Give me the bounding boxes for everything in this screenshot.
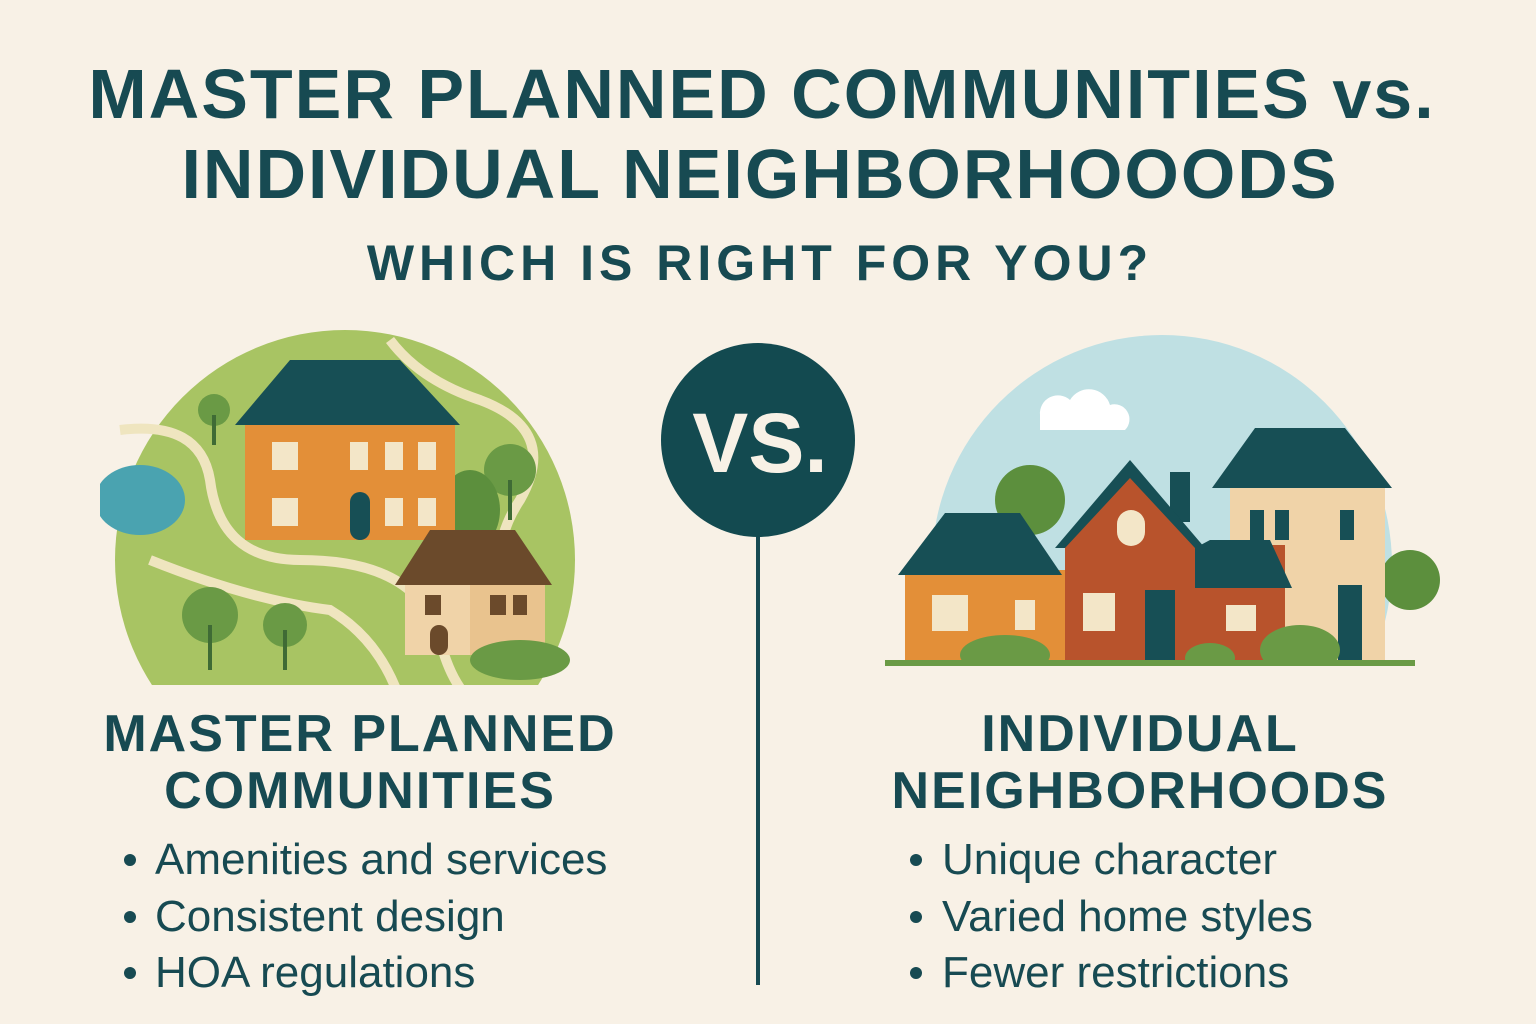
subtitle: WHICH IS RIGHT FOR YOU?: [367, 235, 1153, 291]
title: [88, 55, 1436, 213]
illustration: individual neighborhood: [885, 335, 1440, 666]
right bullets: Fewer restrictions: [942, 948, 1289, 997]
title: INDIVIDUAL NEIGHBORHOOODS: [181, 135, 1339, 213]
illustration: master planned community: [100, 330, 575, 685]
left bullets: Consistent design: [155, 892, 505, 941]
right bullets: [910, 835, 1313, 997]
left heading: COMMUNITIES: [164, 762, 556, 820]
left heading: [103, 705, 617, 820]
right heading: NEIGHBORHOODS: [892, 762, 1388, 820]
right bullets: Varied home styles: [942, 892, 1313, 941]
left bullets: [124, 835, 607, 997]
title: MASTER PLANNED COMMUNITIES vs.: [88, 55, 1436, 133]
left heading: MASTER PLANNED: [103, 705, 617, 763]
left bullets: Amenities and services: [155, 835, 607, 884]
left bullets: HOA regulations: [155, 948, 475, 997]
right bullets: Unique character: [942, 835, 1277, 884]
vs badge: [661, 343, 855, 985]
vs badge: VS.: [692, 396, 828, 490]
right heading: [892, 705, 1388, 820]
right heading: INDIVIDUAL: [981, 705, 1299, 763]
